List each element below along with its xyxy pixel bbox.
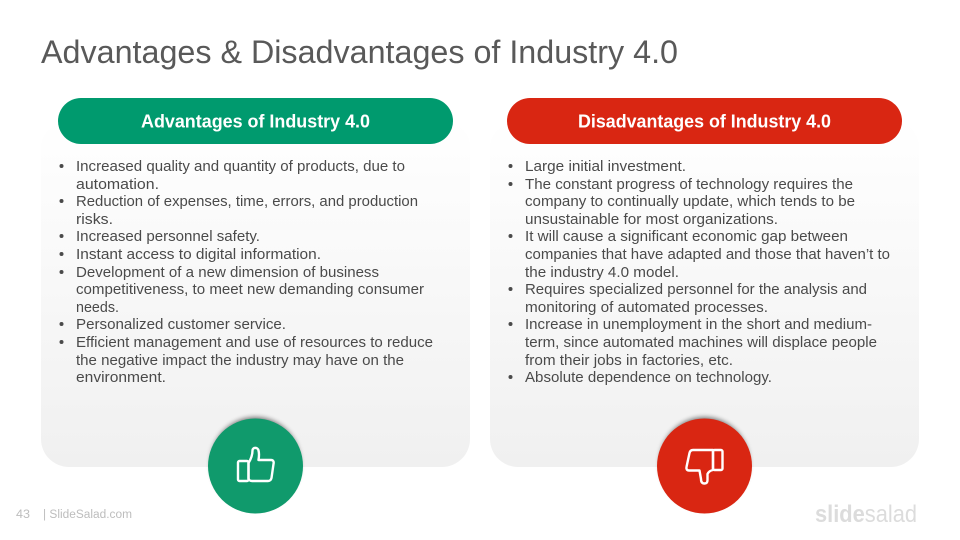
footer source: | SlideSalad.com xyxy=(43,509,132,521)
panel background: advantages xyxy=(41,120,470,467)
text block: disadvantages list: Absolute dependence on technology. xyxy=(525,369,772,386)
text block: disadvantages list: Requires specialized personnel for the analysis and xyxy=(525,281,867,298)
text block: advantages list: competitiveness, to meet new demanding consumer xyxy=(76,281,424,298)
text block: advantages list: Reduction of expenses, time, errors, and production xyxy=(76,193,418,210)
icon: thumbs up xyxy=(208,417,303,514)
panel: advantages xyxy=(41,98,470,514)
text block: advantages list: Efficient management and use of resources to reduce xyxy=(76,334,433,351)
text block: advantages list: Increased personnel safety. xyxy=(76,228,260,245)
title: Advantages & Disadvantages of Industry 4.0 xyxy=(41,34,678,70)
panel background: disadvantages xyxy=(490,120,919,467)
text block: advantages list: Increased quality and quantity of products, due to xyxy=(76,158,405,175)
panel: disadvantages xyxy=(490,98,919,514)
text block: disadvantages list: the industry 4.0 model. xyxy=(525,264,679,281)
text block: disadvantages list: unsustainable for most organizations. xyxy=(525,211,778,228)
text block: disadvantages list: Increase in unemployment in the short and medium- xyxy=(525,316,872,333)
text block: advantages list: environment. xyxy=(76,369,166,386)
heading: advantages: Advantages of Industry 4.0 xyxy=(141,110,370,132)
text block: disadvantages list: monitoring of automated processes. xyxy=(525,299,768,316)
text block: advantages list: Development of a new dimension of business xyxy=(76,264,379,281)
text block: advantages list: Personalized customer service. xyxy=(76,316,286,333)
text block: disadvantages list: term, since automated machines will displace people xyxy=(525,334,877,351)
text block: advantages list: automation. xyxy=(76,176,159,193)
heading: advantages xyxy=(58,98,453,144)
text block: disadvantages list: Large initial investment. xyxy=(525,158,686,175)
heading: disadvantages xyxy=(507,98,902,144)
logo: slidesalad: slidesalad xyxy=(815,501,917,528)
text block: disadvantages list: It will cause a significant economic gap between xyxy=(525,228,848,245)
page number: 43 xyxy=(16,509,30,521)
text block: advantages list: risks. xyxy=(76,211,113,228)
text block: advantages list xyxy=(60,158,433,386)
text block: disadvantages list: from their jobs in factories, etc. xyxy=(525,352,733,369)
heading: disadvantages: Disadvantages of Industry 4.0 xyxy=(578,110,831,132)
text block: advantages list: needs. xyxy=(76,299,119,316)
text block: disadvantages list xyxy=(508,158,890,386)
text block: disadvantages list: The constant progress of technology requires the xyxy=(525,176,853,193)
text block: advantages list: the negative impact the industry may have on the xyxy=(76,352,404,369)
icon: thumbs down xyxy=(657,417,752,514)
text block: disadvantages list: company to continually update, which tends to be xyxy=(525,193,855,210)
text block: advantages list: Instant access to digital information. xyxy=(76,246,321,263)
text block: disadvantages list: companies that have adapted and those that haven’t to xyxy=(525,246,890,263)
